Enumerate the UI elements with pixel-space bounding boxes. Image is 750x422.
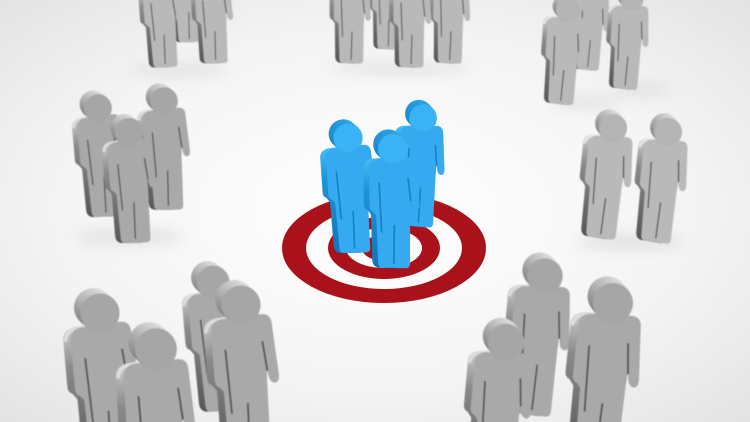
group: top centre figures bbox=[330, 0, 471, 68]
group: bottom left figures bbox=[59, 263, 285, 422]
group: middle right figures bbox=[573, 111, 693, 245]
group: middle left figures bbox=[69, 86, 193, 245]
group: top right figures bbox=[538, 0, 652, 106]
target bullseye bbox=[282, 193, 486, 303]
group: bottom right figures bbox=[457, 255, 649, 422]
group: top left figures bbox=[136, 0, 236, 69]
group: blue target figures bbox=[318, 103, 447, 269]
floor shadows bbox=[75, 62, 685, 250]
